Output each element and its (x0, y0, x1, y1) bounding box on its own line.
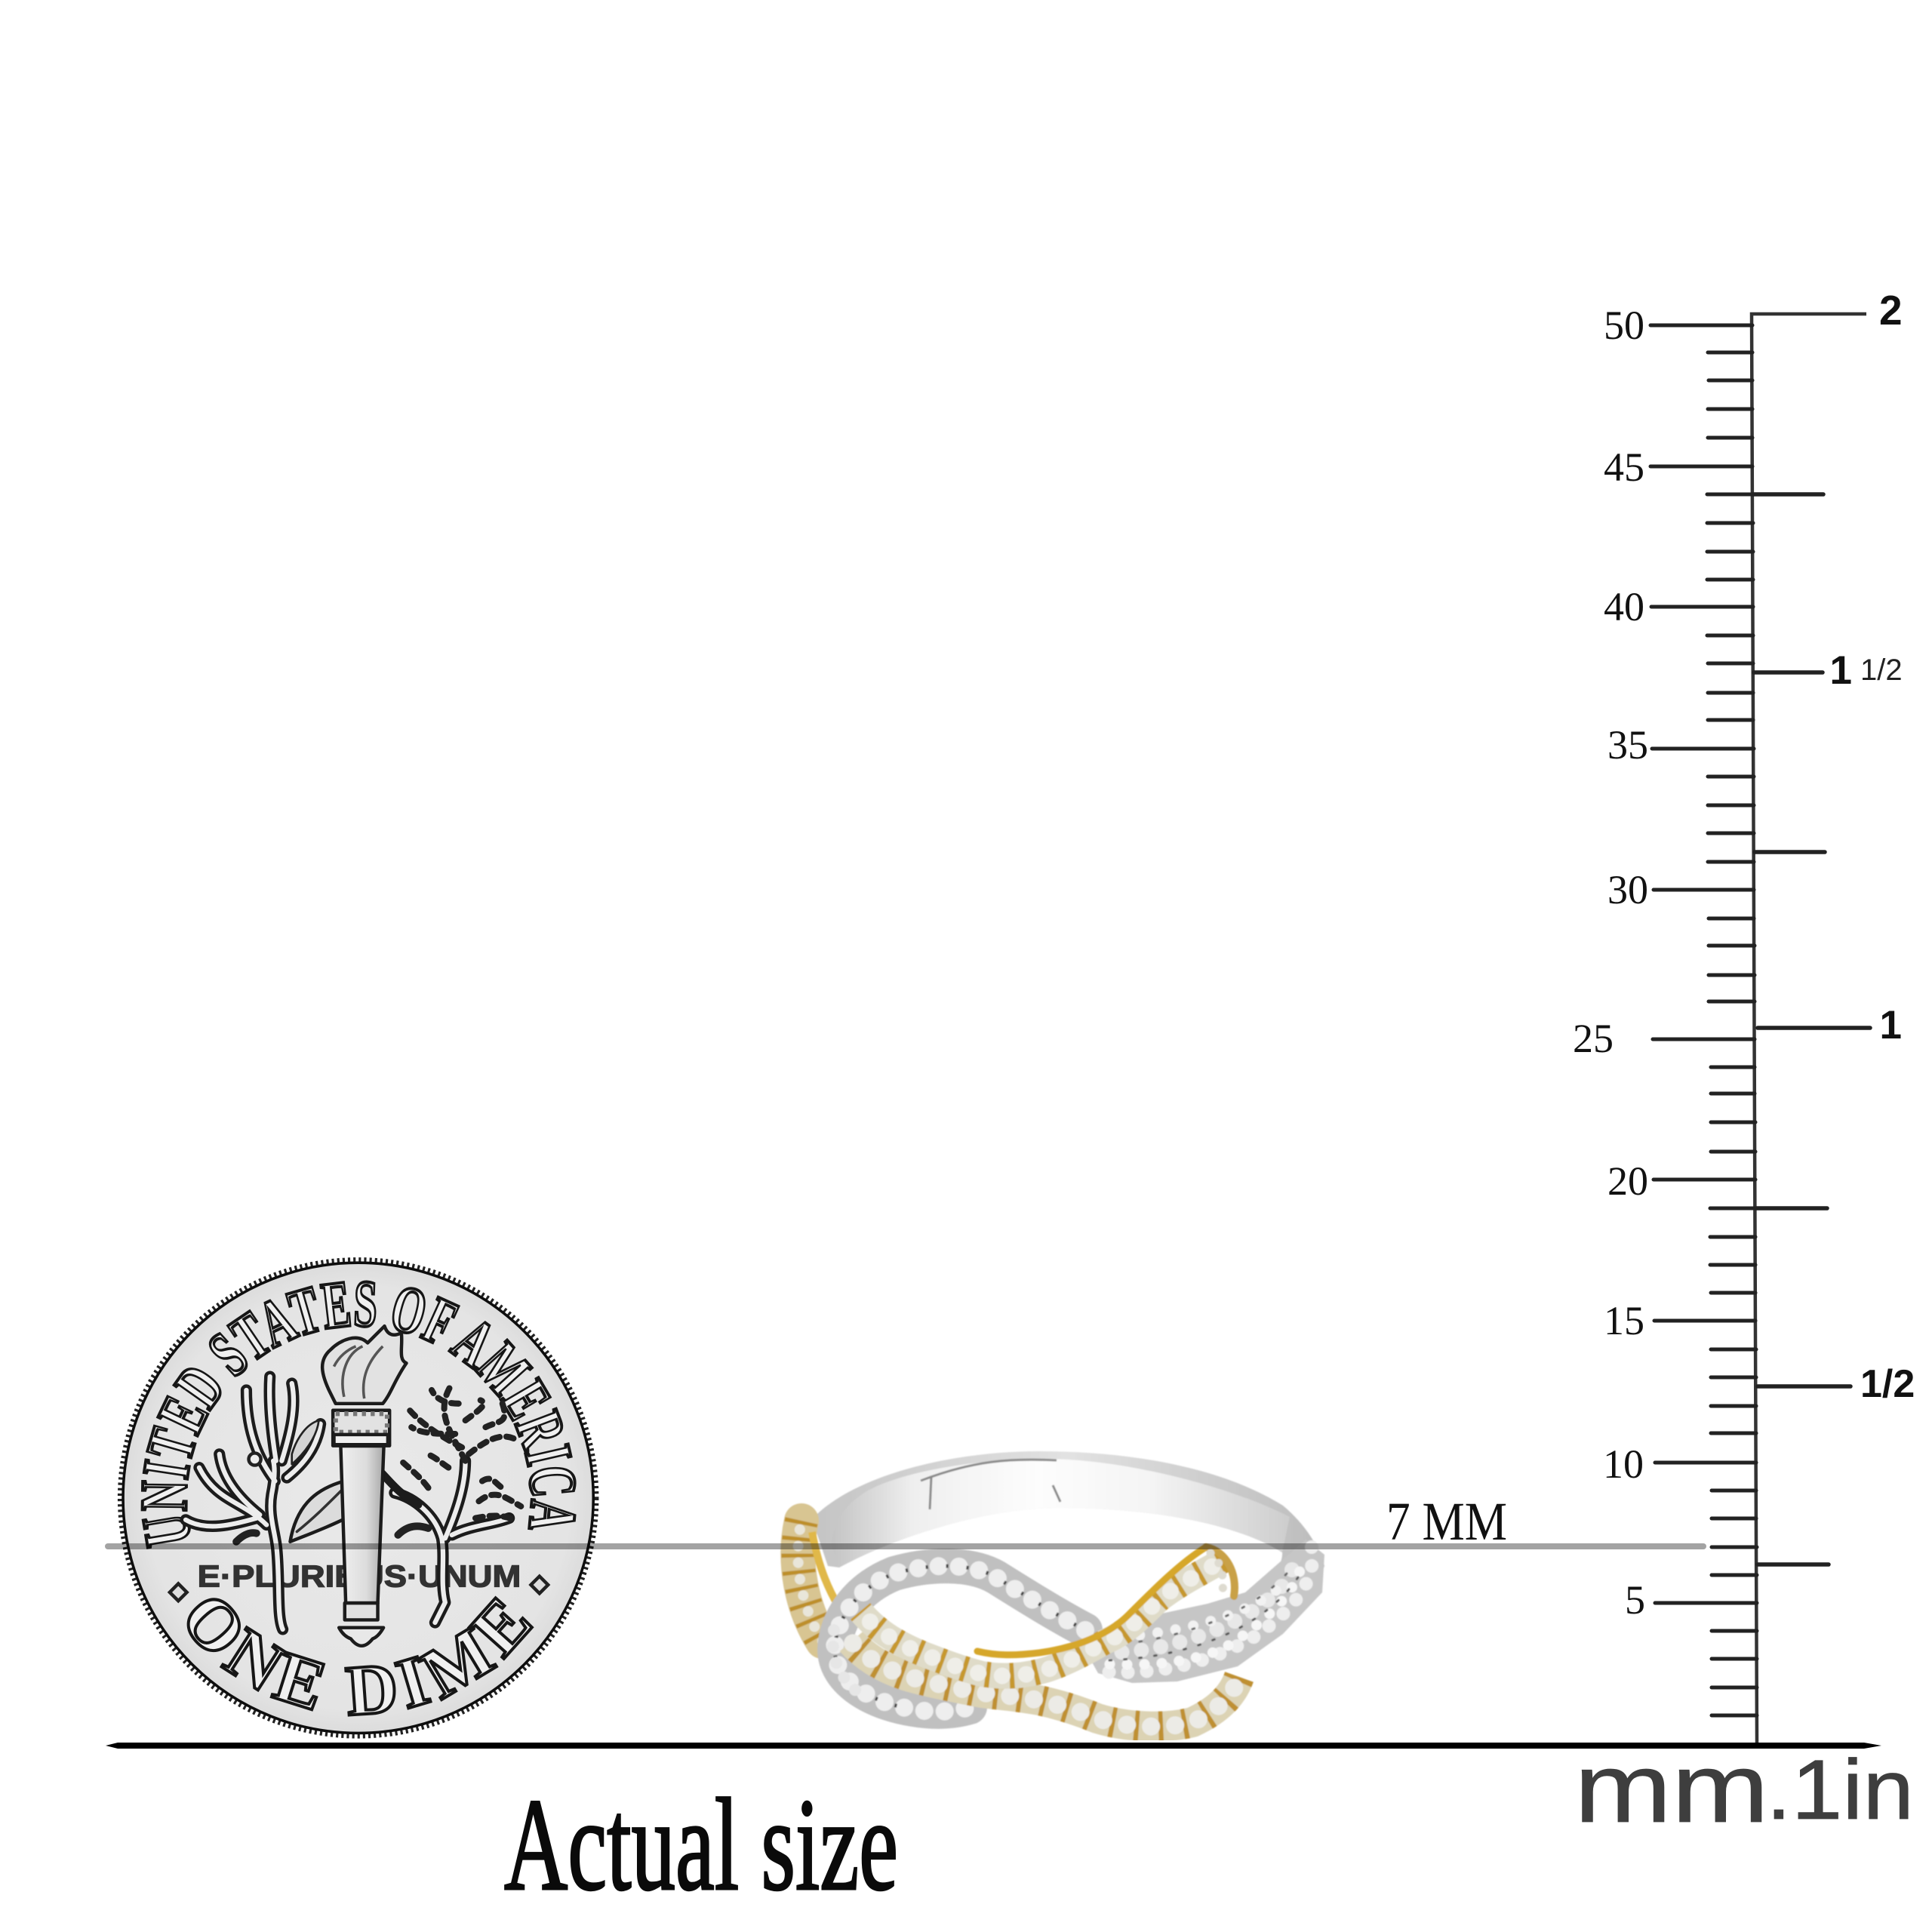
millimetre labels: 20 (1607, 1158, 1648, 1204)
ring shank back (812, 1451, 1324, 1600)
ring interior reflections (921, 1460, 1060, 1509)
millimetre labels: 10 (1603, 1441, 1644, 1487)
reeded edge (120, 1260, 596, 1736)
inch labels: 2 (1879, 287, 1903, 334)
inch labels: 1 (1830, 648, 1852, 693)
ruler axis (1752, 314, 1866, 1746)
white pave right shank (1087, 1540, 1324, 1683)
ring: two-tone knot band (798, 1451, 1324, 1727)
millimetre labels: 5 (1625, 1577, 1645, 1623)
coin face (123, 1263, 593, 1733)
olive branch (186, 1377, 352, 1629)
unit label: mm.1in: mm (1574, 1733, 1769, 1843)
gold lower band (851, 1641, 1239, 1727)
coin dots (170, 1577, 548, 1601)
millimetre major ticks (1651, 325, 1757, 1603)
millimetre labels: 40 (1604, 584, 1644, 629)
unit label: mm.1in: .1in (1766, 1743, 1914, 1837)
ring interior (832, 1459, 1290, 1567)
gold left shank (798, 1521, 839, 1641)
millimetre labels: 50 (1604, 303, 1644, 348)
ruler (1573, 287, 1915, 1746)
inch labels (1830, 287, 1915, 1406)
oak branch (373, 1387, 521, 1623)
gold upper band (860, 1547, 1235, 1676)
inch ticks (1752, 494, 1870, 1564)
baseline (106, 1743, 1881, 1749)
white pave loop (833, 1566, 1085, 1712)
7 MM measurement line (105, 1543, 1706, 1549)
label: 7 MM: 7 MM (1386, 1491, 1507, 1552)
caption: Actual size: Actual size (504, 1771, 898, 1918)
torch (322, 1326, 406, 1646)
millimetre labels: 45 (1604, 445, 1644, 490)
coin: one dime (118, 1257, 599, 1739)
millimetre labels: 30 (1607, 867, 1648, 912)
millimetre labels: 35 (1607, 722, 1648, 768)
inch labels: 1/2 (1860, 654, 1903, 687)
millimetre labels: 25 (1573, 1016, 1614, 1061)
unit label: mm.1in (1574, 1733, 1914, 1843)
coin legend: UNITED STATES OF AMERICA (140, 1280, 577, 1549)
millimetre labels: 15 (1604, 1298, 1644, 1343)
coin denomination: ONE DIME (187, 1595, 534, 1717)
inch labels: 1/2 (1860, 1362, 1915, 1406)
coin motto: E·PLURIBUS·UNUM (198, 1559, 521, 1594)
millimetre minor ticks (1707, 352, 1757, 1715)
millimetre labels (1573, 303, 1648, 1623)
inch labels: 1 (1880, 1003, 1902, 1048)
